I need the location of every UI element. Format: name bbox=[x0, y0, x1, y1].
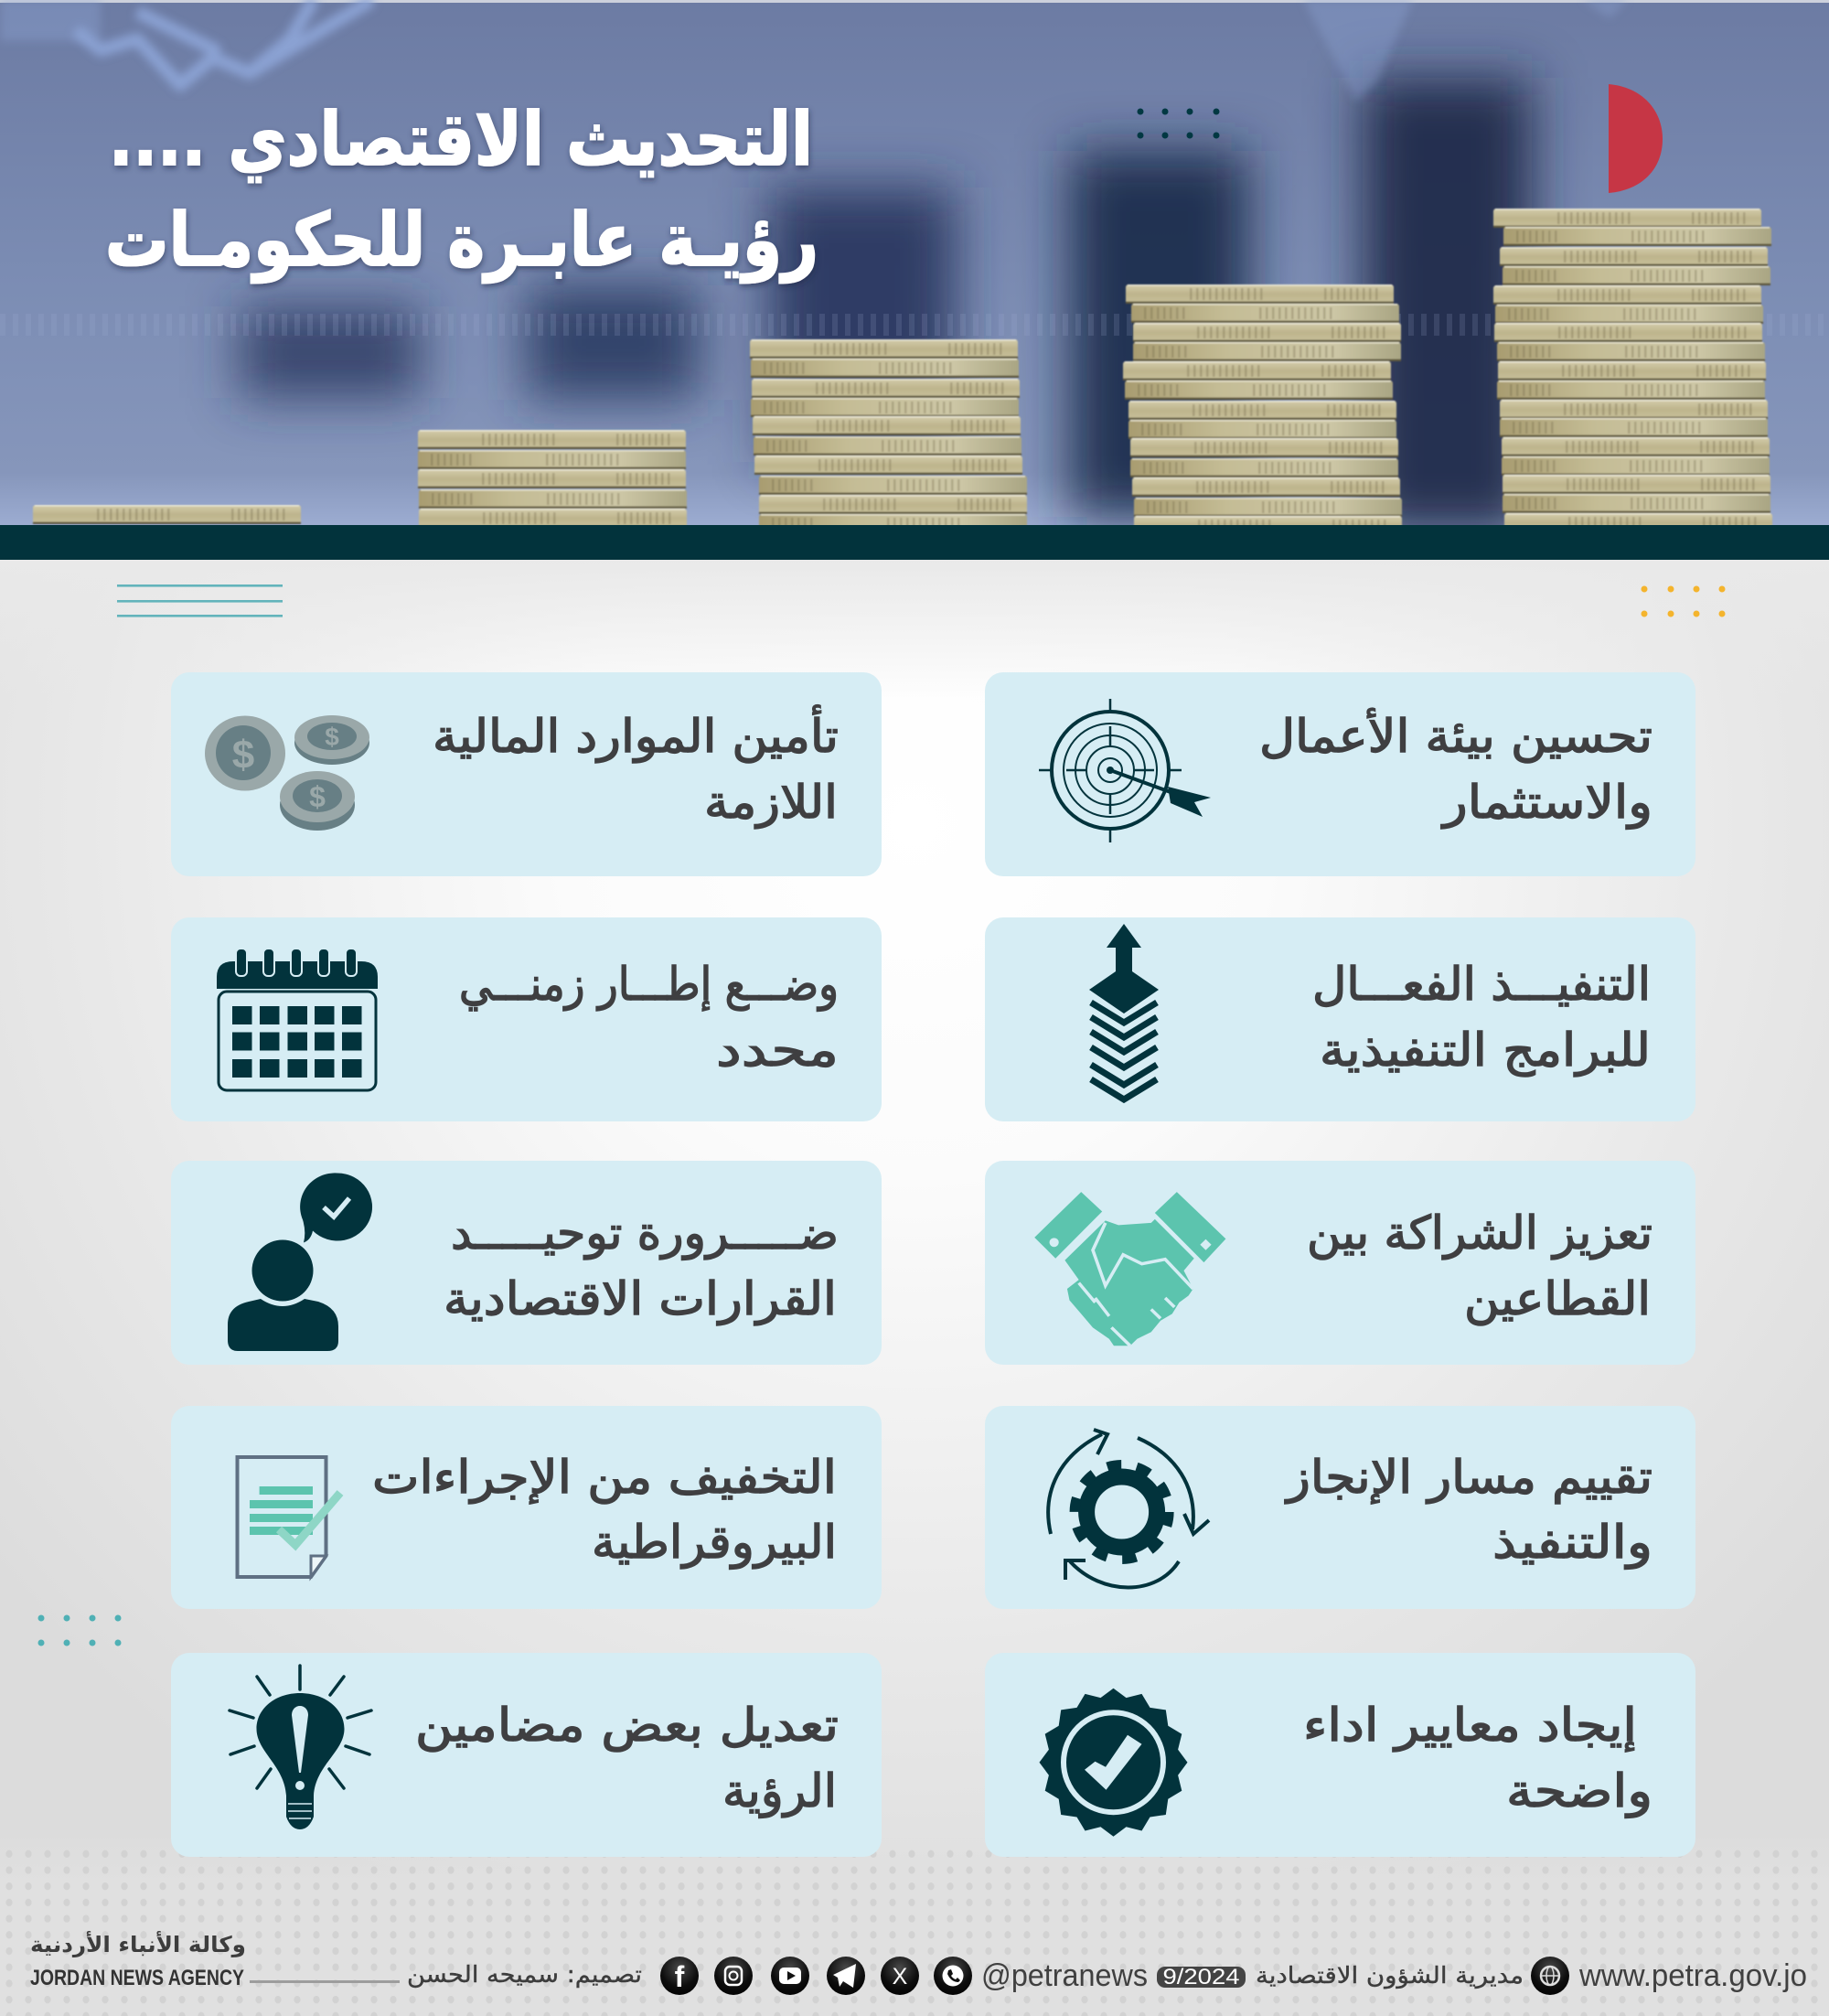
icon: telegram bbox=[827, 1957, 865, 1995]
icon: target with arrow bbox=[1039, 699, 1211, 842]
panel: effective implementation bbox=[985, 917, 1695, 1121]
icon: coins bbox=[205, 715, 369, 831]
dark header bar bbox=[0, 525, 1829, 560]
footer: agency logo text: JORDAN NEWS AGENCY bbox=[30, 1966, 244, 1990]
footer: designer credit: تصميم: سميحه الحسن bbox=[407, 1961, 642, 1989]
title: رؤيـة عابـرة للحكومـات bbox=[105, 198, 818, 284]
icon: whatsapp bbox=[934, 1957, 972, 1995]
title bbox=[105, 97, 818, 284]
footer: department name: مديرية الشؤون الاقتصادية bbox=[1256, 1962, 1524, 1989]
footer: agency logo text bbox=[30, 1931, 246, 1990]
icon: check badge bbox=[1039, 1689, 1187, 1837]
panel: clear performance standards: إيجاد معايير اداء bbox=[1303, 1699, 1637, 1753]
panel: clear performance standards bbox=[985, 1653, 1695, 1857]
teal dots bbox=[38, 1615, 121, 1646]
icon: instagram bbox=[714, 1957, 753, 1995]
icon: handshake bbox=[1034, 1192, 1225, 1346]
coin stack 1 bbox=[33, 505, 301, 524]
panel: secure financial resources: اللازمة bbox=[704, 776, 838, 829]
panel: amend vision contents: تعديل بعض مضامين bbox=[415, 1699, 839, 1752]
panel: strengthen partnership: تعزيز الشراكة بين bbox=[1307, 1206, 1653, 1260]
panel: strengthen partnership: القطاعين bbox=[1464, 1272, 1651, 1325]
panel: secure financial resources bbox=[171, 672, 882, 876]
footer rule bbox=[250, 1980, 400, 1983]
title: ‏التحديث الاقتصادي ....‏ bbox=[109, 97, 813, 183]
panel: evaluate achievement track: والتنفيذ bbox=[1492, 1516, 1653, 1570]
icon: calendar bbox=[217, 949, 378, 1090]
panel: unify economic decisions: القرارات الاقتصادية bbox=[444, 1272, 837, 1325]
panel: set a time frame: وضـــع إطـــار زمنـــي bbox=[459, 958, 839, 1012]
icon: person with speech bubble bbox=[228, 1173, 372, 1351]
panel: evaluate achievement track bbox=[985, 1406, 1695, 1609]
panel: improve business environment: تحسين بيئة الأعمال bbox=[1259, 708, 1653, 763]
decorative lines bbox=[117, 584, 283, 617]
icon: coins: $ bbox=[232, 733, 254, 777]
icon: globe bbox=[1531, 1957, 1569, 1995]
panel: effective implementation: للبرامج التنفيذية bbox=[1320, 1024, 1651, 1078]
coin stack 4 bbox=[1123, 284, 1402, 535]
panel: clear performance standards: واضحة bbox=[1506, 1764, 1653, 1818]
header photo: blurred chart backdrop with coin stacks bbox=[0, 0, 1829, 535]
panel: improve business environment bbox=[985, 672, 1695, 876]
panel: secure financial resources: تأمين الموارد المالية bbox=[433, 704, 839, 763]
icon: document with check bbox=[238, 1457, 340, 1577]
panel: amend vision contents bbox=[171, 1653, 882, 1857]
panel: unify economic decisions bbox=[171, 1161, 882, 1365]
panel: effective implementation: التنفيـــذ الفعـــال bbox=[1312, 958, 1651, 1011]
panel: improve business environment: والاستثمار bbox=[1440, 776, 1653, 830]
coin stack 2 bbox=[418, 430, 687, 528]
icon: X bbox=[881, 1957, 919, 1995]
footer: agency logo text: وكالة الأنباء الأردنية bbox=[30, 1931, 246, 1957]
red half circle bbox=[1609, 84, 1663, 193]
icon: coins: $ bbox=[325, 723, 339, 751]
panel: amend vision contents: الرؤية bbox=[722, 1764, 837, 1818]
footer: website: www.petra.gov.jo bbox=[1578, 1958, 1807, 1993]
footer: handle: @petranews bbox=[981, 1958, 1148, 1993]
coin stack 5 bbox=[1493, 209, 1772, 532]
panel: reduce bureaucratic procedures bbox=[171, 1406, 882, 1609]
icon: youtube bbox=[771, 1957, 809, 1995]
date badge: 9/2024 bbox=[1163, 1965, 1240, 1989]
icon: arrow over chevrons bbox=[1089, 924, 1159, 1099]
panel: unify economic decisions: ضـــــرورة توحيـــــد bbox=[451, 1206, 839, 1260]
panel: set a time frame bbox=[171, 917, 882, 1121]
icon: facebook: f bbox=[675, 1960, 685, 1993]
panel: reduce bureaucratic procedures: التخفيف من الإجراءات bbox=[372, 1451, 837, 1504]
coin stack 3 bbox=[750, 339, 1027, 533]
panel: reduce bureaucratic procedures: البيروقراطية bbox=[592, 1516, 837, 1570]
icon: light bulb bbox=[230, 1666, 371, 1829]
icon: gear with cycle arrows bbox=[1048, 1430, 1209, 1588]
icon: coins: $ bbox=[309, 780, 326, 813]
panel: set a time frame: محدد bbox=[716, 1024, 839, 1077]
header dots bbox=[1138, 108, 1220, 139]
icon: X: X bbox=[893, 1964, 908, 1989]
panel: evaluate achievement track: تقييم مسار الإنجاز bbox=[1284, 1451, 1653, 1504]
yellow dots bbox=[1641, 585, 1725, 617]
panel: strengthen partnership bbox=[985, 1161, 1695, 1365]
icon: facebook bbox=[660, 1957, 699, 1995]
